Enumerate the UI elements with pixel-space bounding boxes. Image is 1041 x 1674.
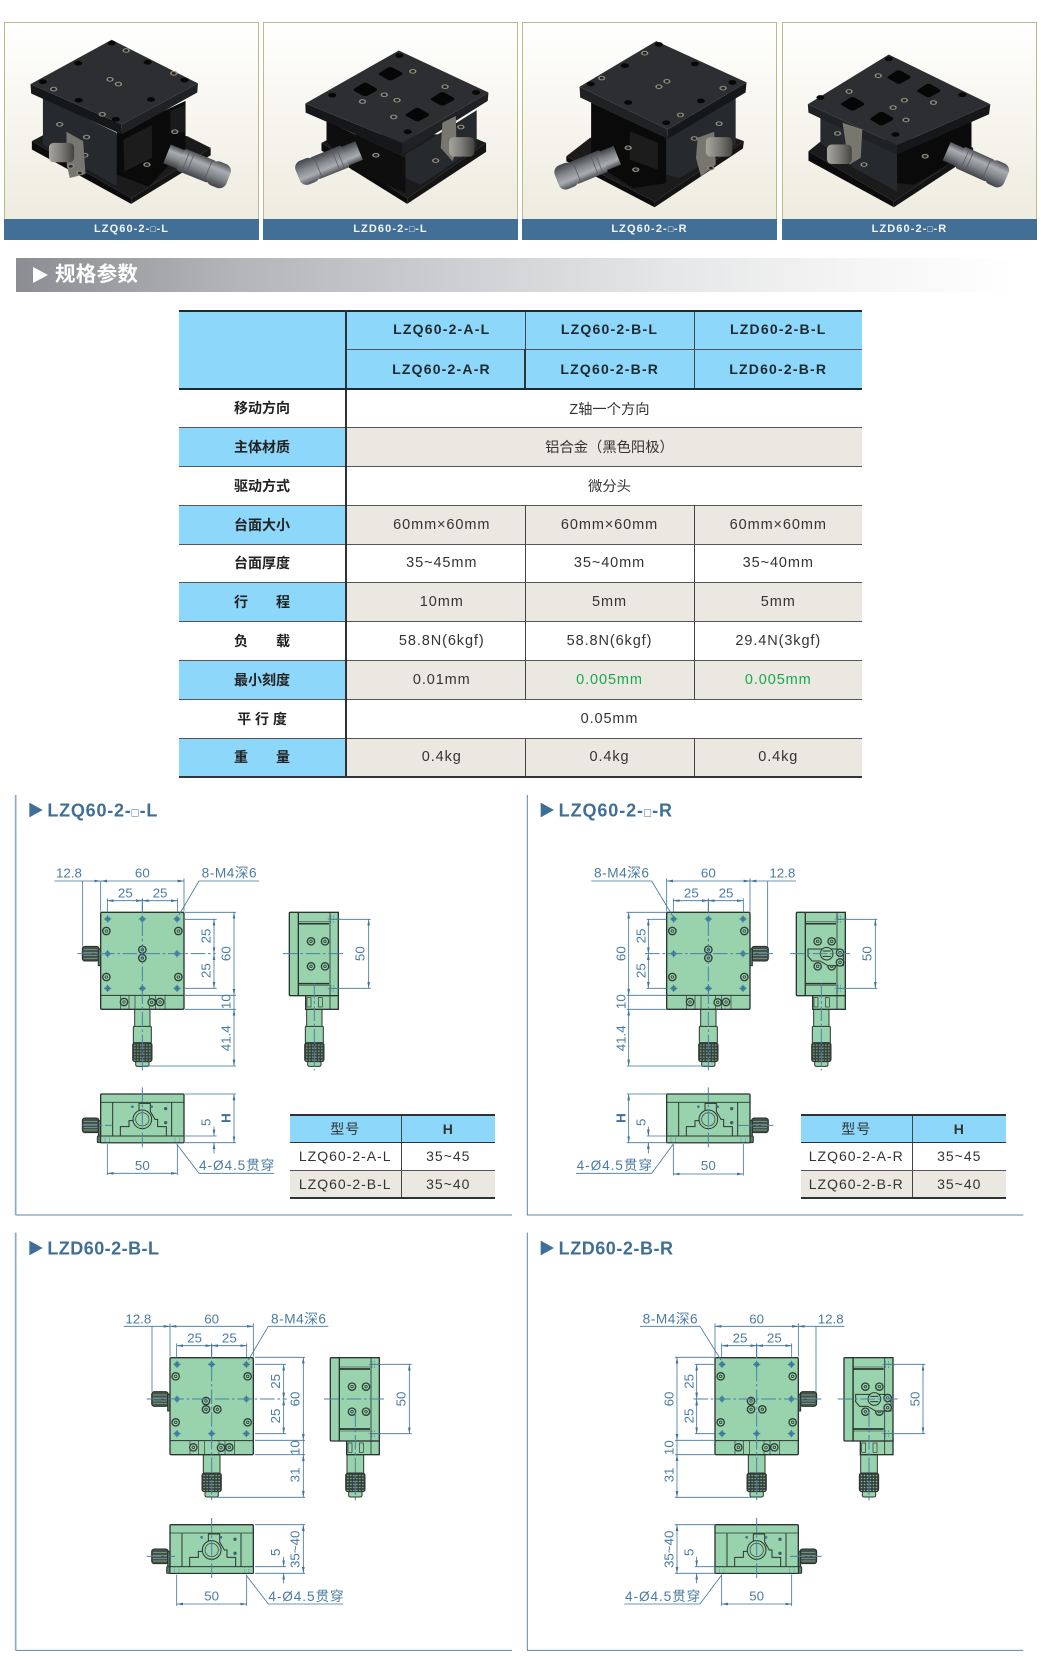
front view [82,1087,184,1150]
caption: LZQ60-2-□-L [94,223,169,235]
dimensions: front: 50 [749,1589,764,1604]
specification table: 58.8N(6kgf) [399,633,485,649]
dimensions: top and side: 8-M4深6 [643,1311,698,1326]
panel title: LZQ60-2-□-R [559,801,672,821]
specification table: 60mm×60mm [393,517,490,533]
dimensions: top and side: 8-M4深6 [594,866,649,881]
height table: LZQ R: LZQ60-2-A-R [809,1148,904,1164]
specification table: LZQ60-2-A-L [393,321,490,337]
height table: LZQ L: LZQ60-2-B-L [299,1176,392,1192]
specification table: 35~45mm [406,555,477,571]
dimensions: top and side: 8-M4深6 [271,1311,326,1326]
dimensions: top and side: 25 [118,885,133,900]
specification table: 0.05mm [581,711,638,727]
top view [645,899,773,1070]
caption [522,219,777,240]
panel: LZD60-2-B-R drawing [526,1232,1024,1651]
dimensions: top and side: 12.8 [125,1311,151,1326]
height table: LZQ R: LZQ60-2-B-R [809,1176,904,1192]
specification table: 主体材质 [234,439,290,455]
product photo card: LZQ60-2-□-R [522,22,777,240]
specification table: 10mm [420,594,464,610]
specification table: LZD60-2-B-L [730,321,826,337]
dimensions: top and side: 25 [767,1330,782,1345]
dimensions: top and side [54,866,371,1066]
specification table: 0.005mm [745,672,812,688]
specification table: LZQ60-2-A-R [392,361,491,377]
top view [693,1344,822,1502]
panel: LZQ60-2-□-L drawing [14,795,512,1216]
dimensions: top and side: 10 [662,1440,677,1455]
specification table: 负 载 [234,633,290,649]
height table: LZQ R: 35~45 [937,1148,981,1164]
specification table: 0.4kg [422,749,462,765]
dimensions: top and side: 60 [701,866,716,881]
front view [715,1518,822,1581]
caption: LZD60-2-□-L [353,223,428,235]
caption [4,219,259,240]
dimensions: front: 50 [135,1158,150,1173]
product photo card: LZQ60-2-□-L [4,22,259,240]
photo: stage LZQ right [522,22,777,219]
specification table: 移动方向 [234,400,290,416]
dimensions: top and side: 41.4 [218,1025,233,1051]
dimensions: top and side: 60 [287,1392,302,1406]
specification table: LZD60-2-B-R [729,361,827,377]
dimensions: front: 35~40 [662,1531,677,1568]
height table: LZQ L: 35~45 [426,1148,470,1164]
panel: LZQ60-2-□-R drawing [526,795,1024,1216]
side view [283,912,345,1070]
caption: LZQ60-2-□-R [611,223,688,235]
dimensions: front: 50 [204,1589,219,1604]
specification table: 行 程 [234,594,290,610]
caption [782,219,1037,240]
dimensions: top and side: 12.8 [56,866,82,881]
specification table: 最小刻度 [234,672,290,688]
dimensions: front: 4-Ø4.5贯穿 [268,1589,344,1604]
dimensions: front: 4-Ø4.5贯穿 [577,1158,652,1173]
dimensions: top and side: 60 [613,946,628,961]
caption [263,219,518,240]
dimensions: front [107,1094,274,1175]
photo: stage LZD right [782,22,1037,219]
dimensions: top and side: 25 [153,885,167,900]
dimensions: front: 35~40 [287,1531,302,1568]
photo: stage LZQ left [4,22,259,219]
dimensions: front [576,1094,743,1176]
specification table: Z轴一个方向 [569,402,650,418]
specification table: LZQ60-2-B-L [561,321,658,337]
height table: LZQ L: 型号 [330,1121,360,1137]
dimensions: top and side: 25 [199,963,214,978]
height table: LZQ R [801,1114,1006,1199]
dimensions: top and side: 50 [353,946,368,961]
dimensions: top and side: 25 [187,1330,202,1345]
dimensions: top and side: 12.8 [769,866,795,881]
dimensions: top and side: 50 [907,1392,922,1406]
specification table: 微分头 [588,479,631,495]
dimensions: top and side: 60 [204,1311,219,1326]
height table: LZQ L: H [443,1121,454,1137]
section heading: 规格参数: 规格参数 [55,263,138,286]
dimensions: top and side: 60 [218,946,233,961]
dimensions: top and side: 25 [199,929,214,943]
dimensions: front: 5 [268,1549,283,1556]
specification table: 重 量 [234,749,290,765]
specification table: 平 行 度 [237,711,287,727]
dimensions: top and side: 25 [682,1374,697,1389]
dimensions: top and side: 60 [135,866,150,881]
specification table: 5mm [592,594,627,610]
front view [147,1518,253,1581]
dimensions: top and side: 8-M4深6 [202,866,257,881]
specification table: 60mm×60mm [730,517,827,533]
dimensions: front: 50 [701,1158,716,1173]
specification table: 铝合金（黑色阳极） [545,440,674,456]
height table: LZQ R: H [954,1121,965,1137]
section heading: 规格参数 [16,258,1016,292]
specification table: 35~40mm [743,555,814,571]
panel: LZD60-2-B-L drawing [14,1232,512,1651]
specification table: LZQ60-2-B-R [560,361,659,377]
dimensions: top and side: 10 [287,1440,302,1455]
dimensions: top and side: 25 [268,1409,283,1423]
specification table: 0.01mm [413,672,471,688]
dimensions: front: 5 [633,1119,648,1126]
product photo card: LZD60-2-□-R [782,22,1037,240]
top view [147,1344,287,1502]
dimensions: top and side: 12.8 [818,1311,844,1326]
dimensions: front: 5 [682,1549,697,1556]
dimensions: top and side: 10 [218,994,233,1009]
specification table: 台面厚度 [234,555,290,571]
dimensions: front [624,1525,792,1606]
dimensions: top and side: 25 [268,1374,283,1389]
top view [77,899,216,1070]
height table: LZQ R: 型号 [841,1121,871,1137]
dimensions: top and side: 25 [682,1409,697,1423]
dimensions: top and side: 60 [662,1392,677,1406]
height table: LZQ R: 35~40 [937,1176,981,1192]
dimensions: front: 4-Ø4.5贯穿 [625,1589,700,1604]
dimensions: top and side: 31 [662,1468,677,1482]
dimensions: front [177,1525,344,1606]
dimensions: top and side: 31 [287,1468,302,1482]
side view [324,1358,386,1502]
product photo card: LZD60-2-□-L [263,22,518,240]
specification table: 驱动方式 [234,478,290,494]
dimensions: top and side: 25 [719,885,733,900]
dimensions: top and side: 41.4 [613,1025,628,1051]
height table: LZQ L: 35~40 [426,1176,470,1192]
caption: LZD60-2-□-R [872,223,947,235]
specification table [179,310,862,778]
height table: LZQ L: LZQ60-2-A-L [299,1148,392,1164]
specification table: 60mm×60mm [561,517,658,533]
side view [790,912,852,1070]
specification table: 5mm [761,594,796,610]
dimensions: top and side: 10 [613,994,628,1009]
dimensions: front: H [218,1113,233,1123]
dimensions: top and side [640,1311,925,1497]
panel title: LZD60-2-B-L [47,1239,159,1259]
dimensions: front: 4-Ø4.5贯穿 [199,1158,274,1173]
dimensions: top and side [591,866,877,1066]
photo: stage LZD left [263,22,518,219]
front view [667,1087,773,1150]
dimensions: top and side: 25 [684,885,699,900]
panel title: LZQ60-2-□-L [47,801,157,821]
dimensions: top and side: 25 [733,1330,747,1345]
dimensions: top and side: 25 [633,929,648,943]
specification table: 58.8N(6kgf) [567,633,652,649]
dimensions: top and side: 25 [222,1330,237,1345]
dimensions: top and side: 60 [749,1311,764,1326]
panel title: LZD60-2-B-R [559,1239,673,1259]
side view [838,1358,900,1502]
specification table: 35~40mm [574,555,645,571]
dimensions: front: H [613,1113,628,1123]
height table: LZQ L [290,1114,495,1199]
specification table: 0.005mm [576,672,643,688]
dimensions: top and side: 50 [394,1392,409,1406]
specification table: 台面大小 [234,517,290,533]
dimensions: front: 5 [199,1119,214,1126]
specification table: 0.4kg [758,749,798,765]
specification table: 0.4kg [590,749,629,765]
dimensions: top and side: 25 [633,963,648,978]
dimensions: top and side [124,1311,412,1497]
specification table: 29.4N(3kgf) [735,633,821,649]
dimensions: top and side: 50 [860,946,875,961]
